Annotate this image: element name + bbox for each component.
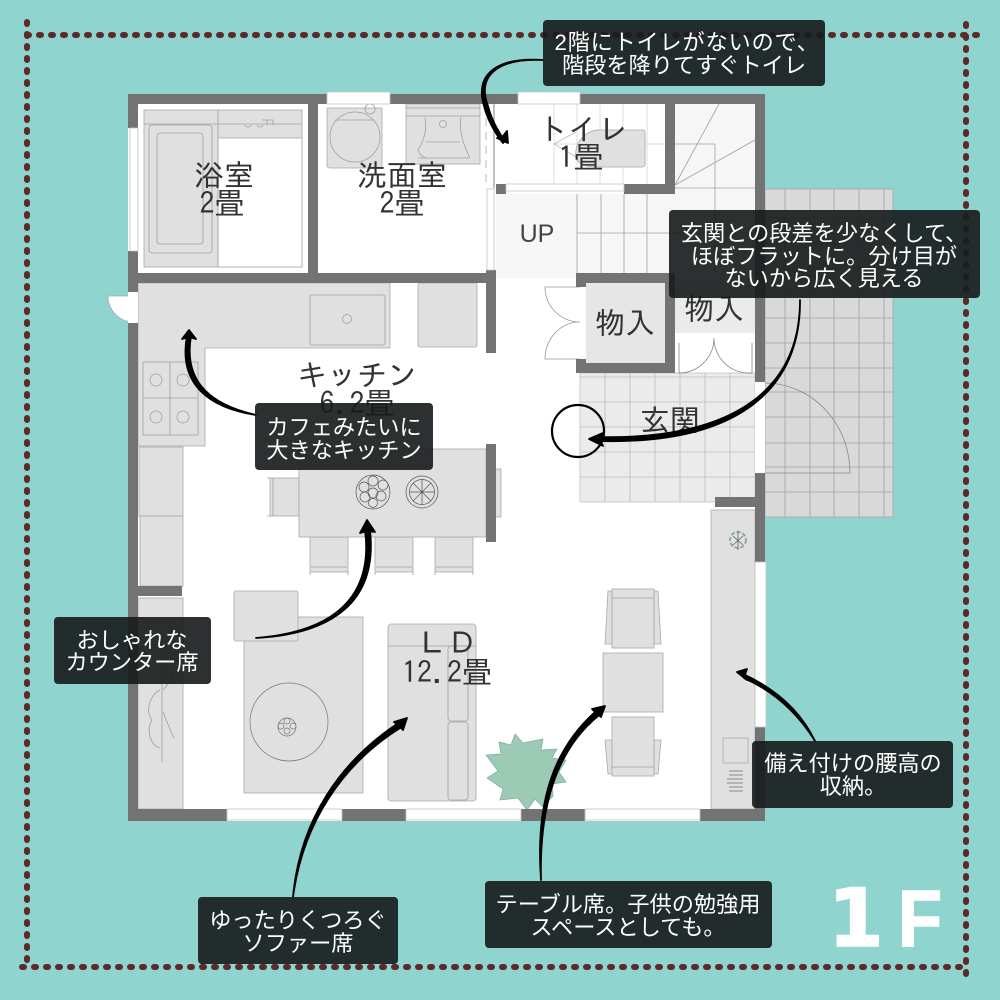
- arrow: to counter seats: [256, 520, 375, 638]
- room label: entrance: 玄関: [640, 405, 700, 435]
- callout: flat entrance: 玄関との段差を少なくして、: [681, 221, 967, 246]
- callout: sofa: ゆったりくつろぐ: [209, 908, 387, 933]
- callout: sofa: ソファー席: [243, 931, 353, 956]
- floor label 1F: 1: [828, 872, 884, 965]
- callout: storage: [752, 741, 953, 808]
- sofa: [388, 624, 476, 801]
- callout: storage: 収納。: [820, 774, 886, 799]
- callout: table seats: [485, 881, 772, 948]
- room label: bathroom: [194, 160, 254, 218]
- washroom fixtures: [327, 104, 480, 168]
- callout: toilet: [543, 20, 825, 86]
- callout: storage: 備え付けの腰高の: [764, 751, 942, 776]
- room label: kitchen: [297, 360, 417, 418]
- room label: living dining: 12.2畳: [402, 657, 492, 687]
- arrow: to entrance step: [589, 300, 800, 446]
- room label: toilet: [538, 114, 628, 172]
- callout: counter seats: [54, 617, 211, 684]
- closets: [545, 283, 755, 373]
- room label: toilet: 1畳: [558, 142, 604, 172]
- lounge rug, seat and side table: [234, 591, 363, 793]
- callout: counter seats: カウンター席: [65, 650, 199, 675]
- floor label 1F: [828, 872, 942, 965]
- entrance tile floor: [580, 373, 755, 502]
- arrow: to table seats: [540, 706, 605, 880]
- room label: living dining: [402, 628, 492, 687]
- callout: toilet: 階段を降りてすぐトイレ: [562, 53, 806, 78]
- built-in storage: [711, 510, 755, 809]
- room label: washroom: 洗面室: [357, 160, 447, 190]
- callout: table seats: テーブル席。子供の勉強用: [496, 892, 760, 917]
- room label: washroom: [357, 160, 447, 218]
- arrow: to kitchen counter: [182, 330, 256, 415]
- callout: flat entrance: ほぼフラットに。分け目が: [691, 244, 957, 269]
- side cabinets: [138, 447, 183, 809]
- floor label 1F: F: [898, 875, 942, 964]
- porch tiles: [765, 189, 893, 517]
- potted plant: [486, 734, 566, 810]
- toilet fixture: [576, 130, 645, 167]
- room label: bathroom: 2畳: [200, 188, 244, 218]
- room label: kitchen: 6.2畳: [320, 388, 394, 418]
- room label: washroom: 2畳: [380, 188, 424, 218]
- callout: toilet: 2階にトイレがないので、: [554, 30, 820, 55]
- kitchen counter: [138, 283, 477, 446]
- room label: closet 2: 物入: [684, 294, 744, 324]
- arrow: to toilet: [482, 60, 543, 143]
- room label: living dining: ＬＤ: [417, 628, 477, 658]
- room label: closet 1: 物入: [595, 308, 655, 338]
- callout: kitchen: 大きなキッチン: [266, 438, 422, 463]
- callout: flat entrance: ないから広く見える: [724, 266, 924, 291]
- callout: counter seats: おしゃれな: [77, 628, 187, 653]
- table seating: [603, 589, 663, 776]
- room label: up stairs: UP: [520, 220, 554, 248]
- room label: toilet: トイレ: [538, 114, 628, 144]
- room label: bathroom: 浴室: [194, 160, 254, 190]
- room label: kitchen: キッチン: [297, 360, 417, 390]
- dining table and chairs: [267, 449, 501, 575]
- arrow: to sofa: [293, 718, 407, 897]
- callout: flat entrance: [669, 210, 980, 298]
- floor plan base: [128, 94, 765, 821]
- callout: kitchen: カフェみたいに: [266, 415, 422, 440]
- arrow: to storage: [737, 669, 815, 741]
- callout: sofa: [198, 897, 398, 964]
- circled step marker: [552, 405, 604, 457]
- walls: [128, 94, 765, 821]
- bathroom fixtures: [144, 110, 302, 267]
- callout: kitchen: [255, 403, 433, 470]
- callout: table seats: スペースとしても。: [530, 915, 726, 940]
- windows and doors: [108, 92, 766, 820]
- stairs: [496, 104, 755, 278]
